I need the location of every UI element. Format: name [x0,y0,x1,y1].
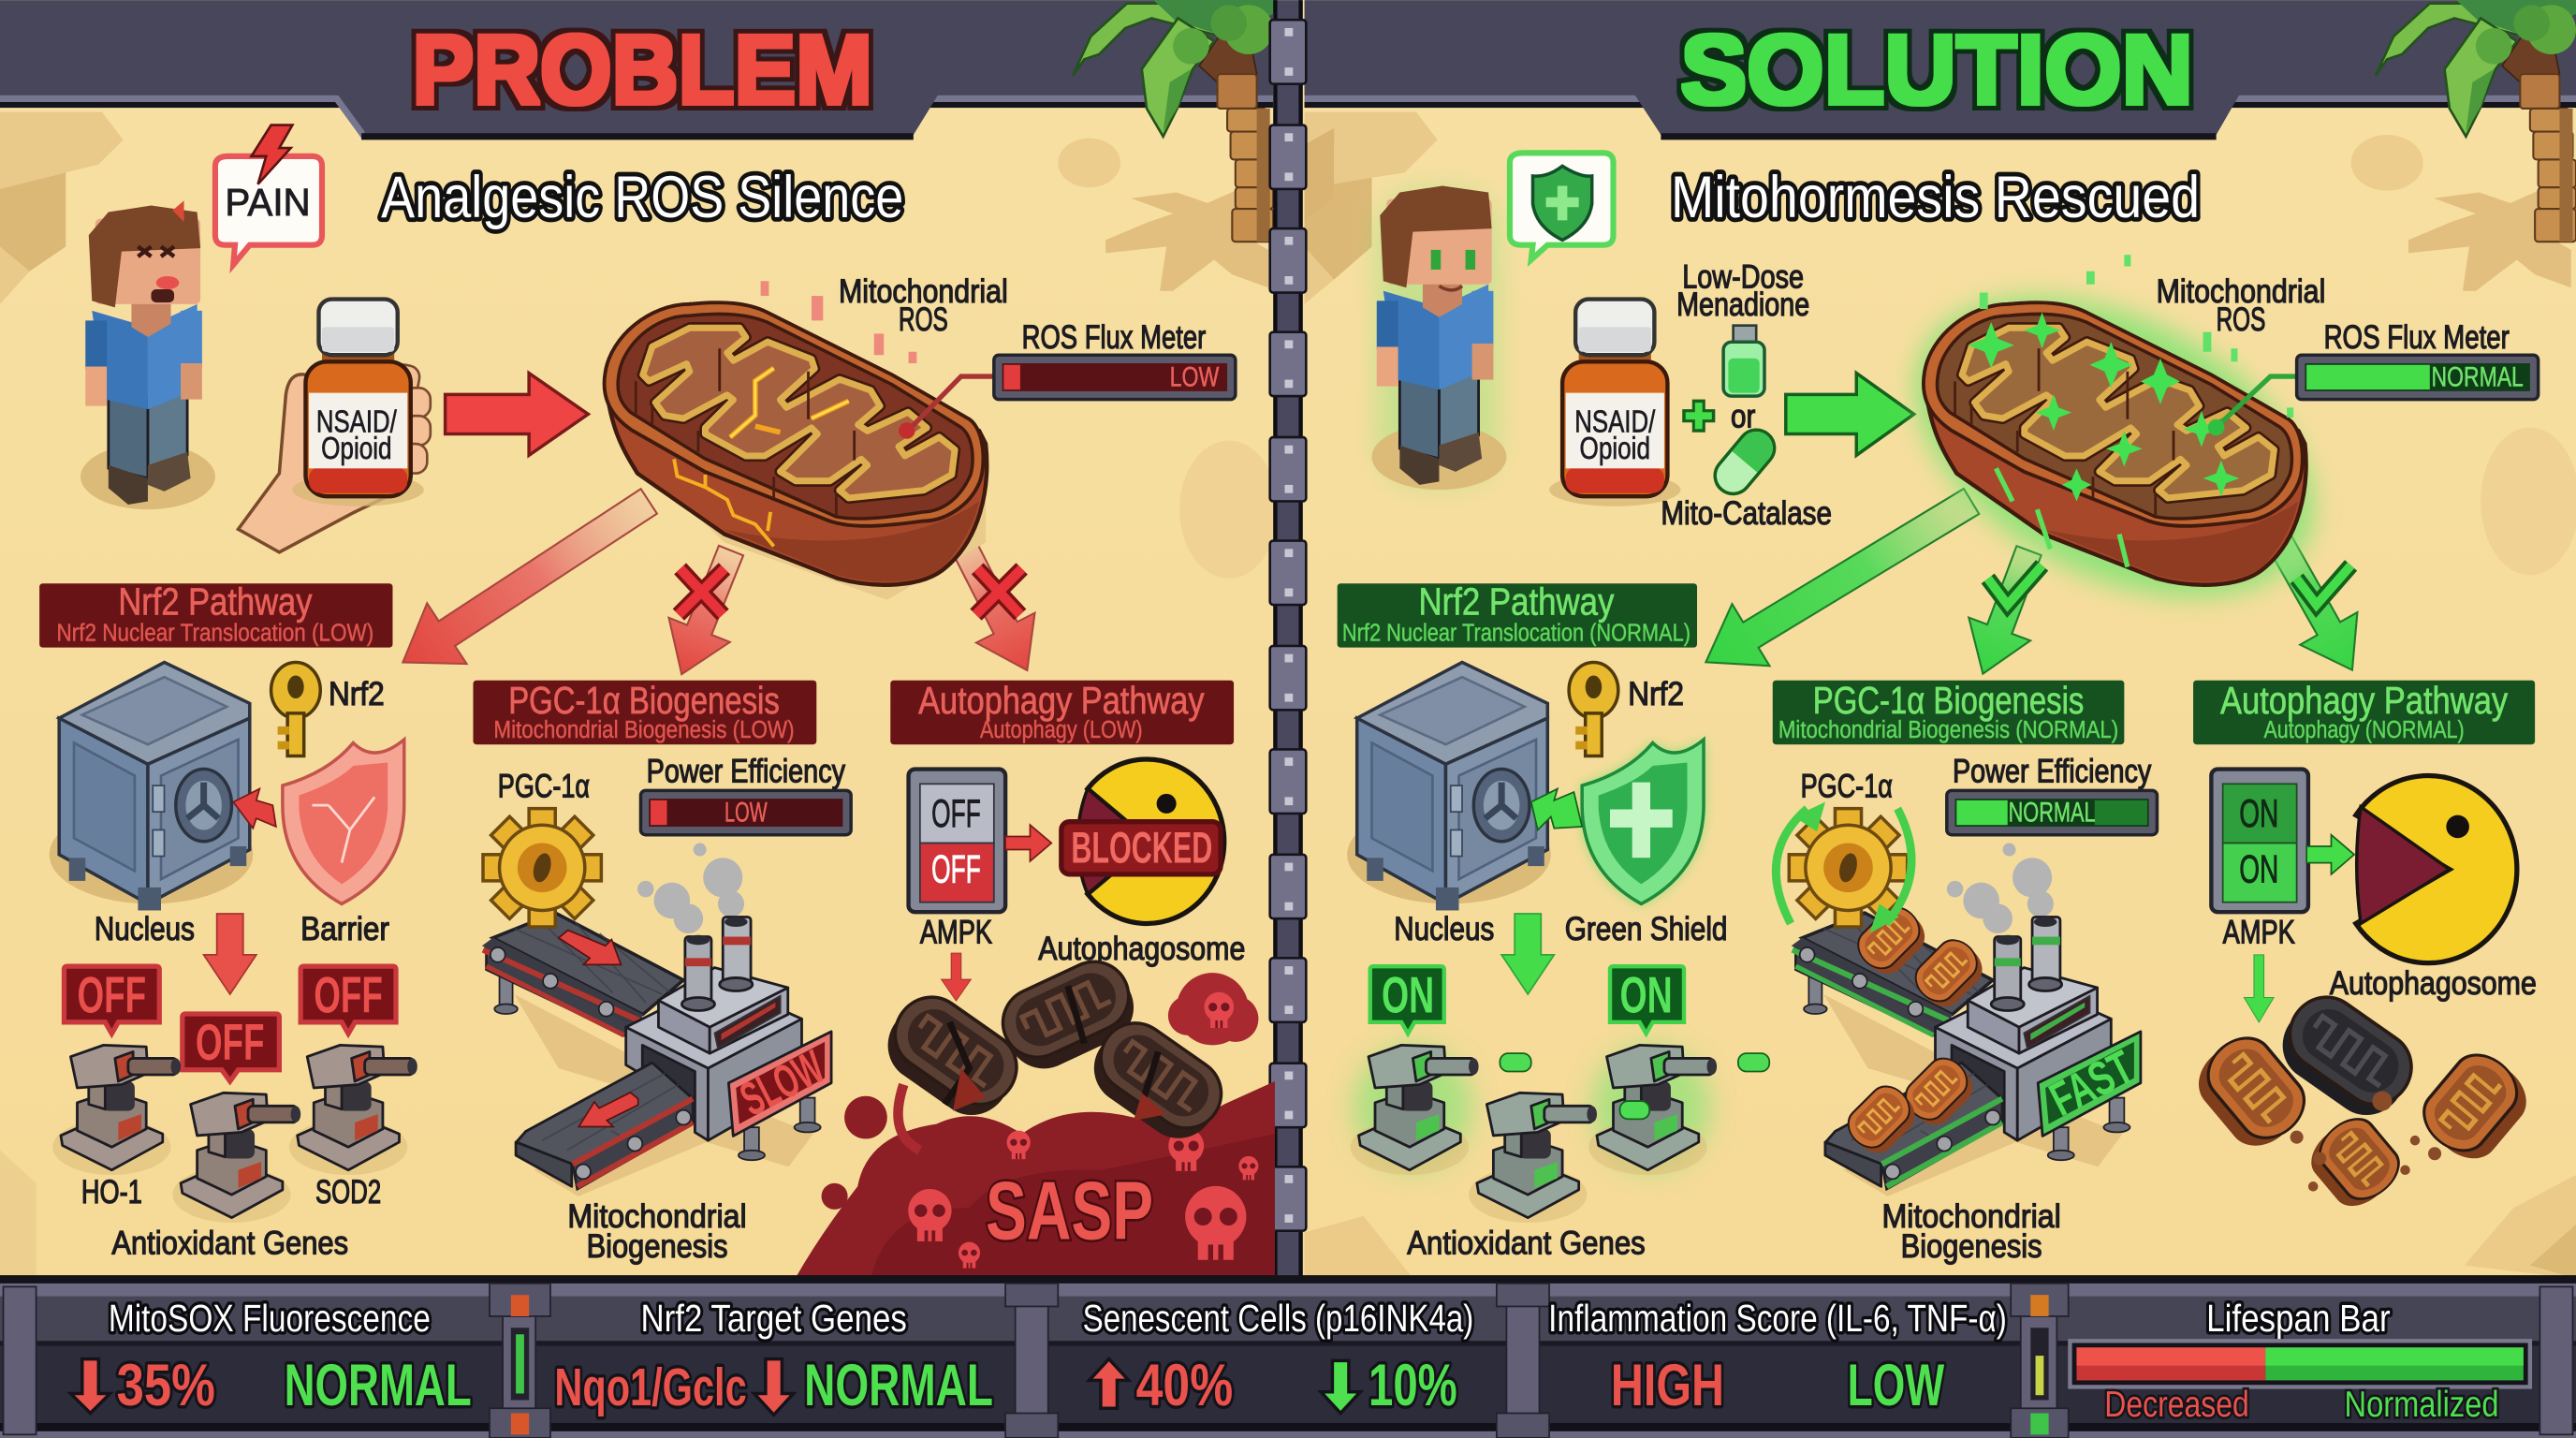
arrow: to autophagy [929,520,1057,685]
recycled mitochondria [2186,983,2539,1217]
icon: menadione vial [1723,326,1764,396]
check on autophagy arrow [2297,565,2351,605]
label: Mitochondrial Biogenesis: Mitochondrial [1881,1198,2061,1235]
glow behind turrets [1354,1045,1710,1170]
banner: Autophagy Pathway [2193,679,2535,744]
icon: Nrf2 key [271,662,320,756]
banner: Autophagy Pathway: Autophagy Pathway [2220,679,2509,722]
banner: Autophagy Pathway: Autophagy (NORMAL) [2264,715,2465,743]
header band: problem [0,0,1273,139]
factory with conveyor: SLOW [732,1040,832,1126]
label: AMPK: AMPK [2223,915,2295,951]
turret: left [1351,1045,1479,1175]
arrow: to Nrf2 pathway [383,471,668,693]
switch: AMPK off: OFF [931,791,981,835]
icon: capsule [1707,422,1782,501]
heading: Analgesic ROS Silence: Analgesic ROS Silence [381,165,903,230]
icon: green shield [1582,740,1704,903]
arrow: AMPK to pacman [2306,835,2354,874]
metric: Senescent Cells: 10% [1368,1353,1457,1418]
character in pain [80,200,215,509]
meter: ROS flux normal [2208,355,2539,435]
turret: middle [172,1093,300,1223]
label: Mitochondrial ROS: ROS [899,301,948,338]
metric: Senescent Cells: Senescent Cells (p16INK4a) [1083,1297,1473,1340]
tag: ON right [1610,966,1684,1034]
label: Nrf2: Nrf2 [329,676,385,712]
meter: power efficiency low: LOW [724,798,768,829]
arrow: shield to safe [233,789,276,829]
label: Nrf2: Nrf2 [1628,676,1684,712]
factory with conveyor: FAST [2042,1040,2142,1126]
tag: OFF left [64,966,159,1034]
arrow: AMPK down [942,953,971,1001]
banner: Nrf2 Pathway: Nrf2 Pathway [1419,580,1615,624]
switch: AMPK on [2211,770,2308,912]
metric: Inflammation Score: LOW [1848,1353,1944,1418]
banner: PGC-1a Biogenesis [473,679,816,744]
speech bubble: PAIN: PAIN [225,181,311,224]
meter: ROS flux low [899,355,1236,439]
banner: PGC-1a Biogenesis: PGC-1α Biogenesis [508,679,780,722]
switch: AMPK off: OFF [931,847,981,891]
hand holding bottle [238,363,431,552]
metric: MitoSOX Fluorescence: MitoSOX Fluorescence [109,1297,431,1340]
banner: Nrf2 Pathway [39,580,392,648]
character healthy [1372,185,1506,490]
meter: power efficiency low [640,790,851,835]
icon: NSAID/Opioid bottle: Opioid [321,432,392,466]
arrow: safe to shield [1531,789,1582,829]
banner: Nrf2 Pathway: Nrf2 Pathway [118,580,313,624]
mitochondrion glowing [1866,236,2363,658]
metric: Nrf2 Target Genes: NORMAL [804,1353,993,1418]
arrow: down to genes [1501,914,1554,994]
panel: problem [39,16,1275,1279]
tag: OFF left: OFF [77,966,146,1023]
metric: MitoSOX Fluorescence [70,1297,472,1418]
banner: Autophagy Pathway: Autophagy Pathway [918,679,1205,722]
icon: NSAID/Opioid bottle: Opioid [1580,432,1650,466]
icon: pacman blocked: BLOCKED [1071,824,1212,873]
label: Mitochondrial ROS [2157,273,2325,338]
arrow: therapy to mitochondrion [1786,374,1914,455]
icon: NSAID/Opioid bottle: NSAID/ [1574,405,1656,440]
arrow: to Nrf2 pathway [1687,470,1990,693]
cross on autophagy arrow [976,568,1022,615]
meter: ROS flux low: LOW [1170,362,1220,393]
header band: solution [1305,0,2576,139]
label: Low-Dose Menadione: Menadione [1676,286,1809,323]
label: Low-Dose Menadione: Low-Dose [1682,258,1804,295]
metric: Inflammation Score: Inflammation Score (IL-6, TNF-α) [1548,1297,2007,1340]
icon: NSAID/Opioid bottle [1549,300,1680,506]
icon: Nrf2 key [1569,662,1618,756]
switch: AMPK on: ON [2239,791,2278,835]
label: PGC-1a: PGC-1α [1801,768,1893,804]
label: Mitochondrial ROS [839,273,1008,338]
label: Mitochondrial Biogenesis: Biogenesis [587,1228,728,1265]
label: AMPK: AMPK [920,915,993,951]
tag: ON left [1370,966,1444,1034]
arrow: down to genes [204,914,256,994]
bullet: middle [1620,1101,1649,1119]
frame separators [4,1284,2572,1438]
label: Antioxidant Genes: Antioxidant Genes [1407,1225,1646,1261]
icon: gear [483,809,601,927]
icon: nucleus safe [50,662,253,910]
factory with conveyor [1791,844,2142,1196]
speech bubble: shield [1510,153,1614,259]
metric: Nrf2 Target Genes: Nqo1/Gclc [554,1357,747,1416]
metric: MitoSOX Fluorescence: NORMAL [285,1353,472,1418]
label: Antioxidant Genes: Antioxidant Genes [111,1225,348,1261]
metric: Nrf2 Target Genes: Nrf2 Target Genes [640,1297,907,1340]
turret: middle [1469,1093,1597,1223]
banner: PGC-1a Biogenesis: Mitochondrial Biogenesis (LOW) [493,715,795,743]
label: SASP: SASP [986,1165,1153,1256]
label: Mitochondrial Biogenesis [567,1198,747,1265]
tag: ON left: ON [1382,966,1434,1023]
metric: Inflammation Score [1548,1297,2007,1418]
damaged mitochondria [873,950,1235,1152]
arrow: drug to mitochondrion [446,374,588,455]
banner: Nrf2 Pathway [1338,580,1697,648]
panel: metrics bar [0,1275,2576,1438]
icon: nucleus safe [1347,662,1551,910]
panel: solution [1338,16,2539,1265]
metric: Inflammation Score: HIGH [1611,1353,1724,1418]
arrow: to PGC-1a [651,538,762,686]
banner: PGC-1a Biogenesis [1773,679,2124,744]
palm tree left [1073,0,1275,291]
tag: OFF right [300,966,396,1034]
cross on PGC arrow [679,568,724,615]
arrow: AMPK to pacman [1005,825,1051,861]
label: Mito-Catalase: Mito-Catalase [1661,495,1832,532]
label: Mitochondrial Biogenesis: Biogenesis [1901,1228,2042,1265]
icon: NSAID/Opioid bottle: NSAID/ [316,405,397,440]
title: PROBLEM: PROBLEM [413,16,872,125]
turret: right [1588,1045,1717,1175]
label: Mitochondrial ROS: ROS [2217,301,2265,338]
label: Barrier: Barrier [300,911,389,947]
label: ROS Flux Meter: ROS Flux Meter [1022,319,1206,356]
icon: pacman blocked [1061,759,1224,924]
icon: cracked shield barrier [283,740,404,903]
bullet: left [1500,1053,1531,1071]
label: SOD2: SOD2 [315,1174,381,1211]
label: HO-1: HO-1 [81,1174,142,1211]
metric: Nrf2 Target Genes [554,1297,993,1418]
icon: gear with rotation arrows [1776,802,1911,933]
icon: plus [1682,400,1715,433]
banner: PGC-1a Biogenesis: PGC-1α Biogenesis [1813,679,2084,722]
label: or: or [1731,398,1756,434]
tag: ON right: ON [1620,966,1673,1023]
metric: Lifespan Bar: Normalized [2345,1385,2499,1425]
metric: Lifespan Bar [2070,1297,2530,1425]
metric: Senescent Cells [1083,1297,1473,1418]
banner: Nrf2 Pathway: Nrf2 Nuclear Translocation (LOW) [57,619,373,647]
mitochondrion [605,281,987,600]
label: Green Shield: Green Shield [1565,911,1727,947]
meter: ROS flux normal: NORMAL [2432,362,2524,393]
SASP cloud [795,973,1275,1279]
label: Nucleus: Nucleus [95,911,195,947]
switch: AMPK off [909,770,1005,912]
speech bubble: PAIN [215,125,322,265]
icon: pacman open [2356,776,2517,963]
heading: Mitohormesis Rescued: Mitohormesis Rescued [1671,165,2200,230]
label: Autophagosome: Autophagosome [1038,931,1245,967]
label: Mitochondrial Biogenesis: Mitochondrial [567,1198,747,1235]
metric: Lifespan Bar: Lifespan Bar [2206,1297,2391,1340]
label: Low-Dose Menadione [1676,258,1809,323]
label: PGC-1a: PGC-1α [498,768,590,804]
tag: OFF right: OFF [314,966,383,1023]
banner: Autophagy Pathway [890,679,1234,744]
label: Mitochondrial ROS: Mitochondrial [2157,273,2325,310]
bullet: right [1738,1053,1769,1071]
label: Nucleus: Nucleus [1394,911,1494,947]
check on PGC arrow [1988,565,2042,605]
switch: AMPK on: ON [2239,847,2278,891]
factory with conveyor [481,844,832,1196]
icon: NSAID/Opioid bottle [292,300,424,506]
label: Mitochondrial ROS: Mitochondrial [839,273,1008,310]
turret: HO-1 [52,1045,181,1175]
arrow: to autophagy [2247,518,2380,686]
metric: Lifespan Bar: Decreased [2104,1385,2249,1425]
arrow: to PGC-1a [1953,539,2059,685]
banner: Autophagy Pathway: Autophagy (LOW) [980,715,1143,743]
meter: power efficiency normal: NORMAL [2009,798,2096,829]
banner: Nrf2 Pathway: Nrf2 Nuclear Translocation (NORMAL) [1342,619,1690,647]
label: ROS Flux Meter: ROS Flux Meter [2324,319,2510,356]
tag: OFF middle [183,1014,279,1081]
label: Power Efficiency: Power Efficiency [1953,754,2152,790]
metric: MitoSOX Fluorescence: 35% [117,1353,215,1418]
label: Mitochondrial Biogenesis [1881,1198,2061,1265]
title: SOLUTION: SOLUTION [1680,16,2193,125]
label: Autophagosome: Autophagosome [2330,965,2537,1002]
meter: power efficiency normal [1947,790,2157,835]
metric: Senescent Cells: 40% [1136,1353,1233,1418]
tag: OFF middle: OFF [196,1014,265,1071]
turret: SOD2 [289,1045,417,1175]
palm tree right [2376,0,2576,291]
center divider [1270,0,1306,1279]
banner: PGC-1a Biogenesis: Mitochondrial Biogenesis (NORMAL) [1778,715,2118,743]
label: Power Efficiency: Power Efficiency [647,754,845,790]
arrow: AMPK down [2244,955,2274,1022]
